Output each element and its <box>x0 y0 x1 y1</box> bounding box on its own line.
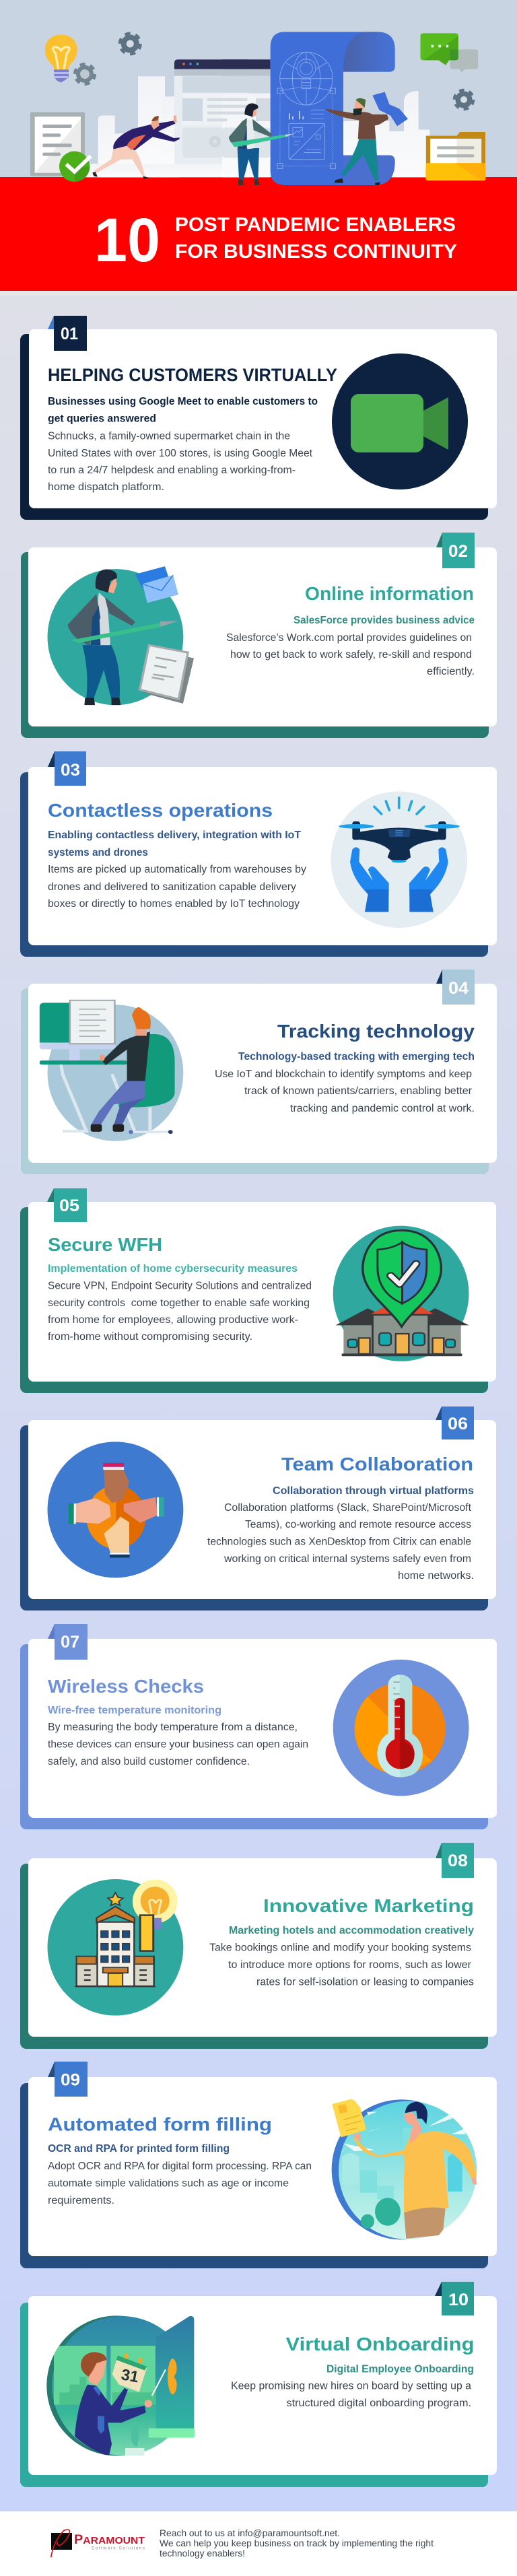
body text: safely, and also build customer confidence. <box>48 1756 250 1767</box>
heading: Automated form filling <box>48 2114 272 2134</box>
logo: PARAMOUNT <box>74 2533 145 2547</box>
illustration: shield pin over houses <box>333 1226 469 1361</box>
number badge 08: 08 <box>448 1852 468 1870</box>
subheading <box>48 396 318 424</box>
number badge 07: 07 <box>61 1633 79 1652</box>
logo: Software Solutions <box>92 2546 145 2550</box>
footer <box>0 2511 517 2576</box>
panel: 01 helping customers virtually <box>20 316 497 520</box>
panel: 07 wireless checks <box>20 1624 497 1829</box>
blue blueprint scroll <box>271 32 395 185</box>
contact text: We can help you keep business on track by implementing the right <box>160 2538 434 2548</box>
icon: gear right <box>455 91 473 108</box>
body text: Teams), co-working and remote resource access <box>245 1519 471 1530</box>
body text: track of known patients/carriers, enabling better <box>244 1085 472 1097</box>
number badge 09: 09 <box>61 2071 80 2090</box>
icon: gear top <box>120 34 139 53</box>
body text <box>226 632 475 677</box>
subheading: Wire-free temperature monitoring <box>48 1705 221 1716</box>
heading: Tracking technology <box>277 1021 475 1042</box>
body text <box>48 431 313 493</box>
subheading: get queries answered <box>48 413 156 424</box>
body text: Take bookings online and modify your booking systems <box>209 1942 471 1954</box>
number badge 07 <box>55 1624 88 1660</box>
number badge 01: 01 <box>61 325 78 343</box>
subheading: systems and drones <box>48 847 148 858</box>
illustration: hotel and light bulb <box>48 1879 183 2016</box>
body text: Schnucks, a family-owned supermarket chain in the <box>48 431 290 442</box>
subheading <box>48 829 302 858</box>
body text <box>48 864 306 910</box>
pushing man <box>92 116 180 179</box>
body text <box>207 1502 474 1582</box>
heading: Contactless operations <box>48 800 273 821</box>
body text: By measuring the body temperature from a distance, <box>48 1722 298 1733</box>
body text: from-home without compromising security. <box>48 1331 252 1343</box>
illustration: team hands <box>48 1442 183 1578</box>
body text: drones and delivered to sanitization capable delivery <box>48 881 296 893</box>
number badge 10 <box>442 2282 474 2315</box>
number badge 04 <box>442 970 475 1005</box>
contact text: Reach out to us at info@paramountsoft.net. <box>160 2528 340 2538</box>
body text: how to get back to work safely, re-skill and respond <box>230 649 472 660</box>
city skyline backdrop left <box>85 76 249 177</box>
number badge 09 <box>55 2062 88 2097</box>
panel: 10 virtual onboarding <box>20 2282 497 2487</box>
number badge 05: 05 <box>59 1196 79 1215</box>
number badge 03: 03 <box>61 761 80 780</box>
body text <box>215 1069 475 1114</box>
subheading: Businesses using Google Meet to enable customers to <box>48 396 318 407</box>
body text <box>231 2381 471 2409</box>
subheading: Implementation of home cybersecurity measures <box>48 1263 298 1275</box>
title text: POST PANDEMIC ENABLERS <box>175 214 456 236</box>
body text: Collaboration platforms (Slack, SharePoint/Microsoft <box>224 1502 472 1514</box>
number badge 01 <box>54 316 87 351</box>
panel: 04 tracking technology <box>21 970 497 1174</box>
title banner <box>0 177 517 296</box>
illustration: presenter and calendar: 31 <box>120 2365 140 2385</box>
body text <box>48 1281 312 1343</box>
body text: Use IoT and blockchain to identify symptoms and keep <box>215 1069 472 1080</box>
city skyline backdrop right <box>222 91 429 177</box>
heading: Team Collaboration <box>281 1454 473 1475</box>
body text: home networks. <box>398 1570 474 1582</box>
subheading: Technology-based tracking with emerging tech <box>238 1051 475 1062</box>
body text: working on critical internal systems safely even from <box>223 1553 471 1565</box>
heading: Secure WFH <box>48 1234 162 1255</box>
logo <box>51 2530 145 2557</box>
subheading: Collaboration through virtual platforms <box>273 1485 474 1497</box>
body text: boxes or directly to homes enabled by IoT technology <box>48 898 300 910</box>
panel: 06 team collaboration <box>20 1406 496 1611</box>
body text: security controls come together to enable safe working <box>48 1297 310 1309</box>
illustration: woman with pen and mail <box>48 566 194 705</box>
browser window <box>174 59 249 164</box>
heading: Innovative Marketing <box>263 1895 474 1916</box>
number badge 06: 06 <box>448 1415 468 1433</box>
contact text <box>160 2528 434 2558</box>
body text: to introduce more options for rooms, such as lower <box>228 1959 471 1971</box>
hero illustration <box>0 0 517 185</box>
illustration: presenter and calendar <box>46 2315 195 2456</box>
subheading: SalesForce provides business advice <box>294 615 475 626</box>
body text: home dispatch platform. <box>48 481 164 493</box>
panel: 05 secure WFH <box>20 1188 496 1393</box>
panel: 03 contactless operations <box>20 751 497 957</box>
body text: rates for self-isolation or leasing to companies <box>256 1977 474 1988</box>
icon: light bulb <box>45 35 77 83</box>
subheading: Digital Employee Onboarding <box>326 2364 474 2375</box>
body text: technologies such as XenDesktop from Citrix can enable <box>207 1536 471 1547</box>
icon: folder <box>425 132 485 180</box>
body text: requirements. <box>48 2195 114 2206</box>
number badge 03 <box>55 751 86 786</box>
illustration: man holding document <box>332 2099 477 2239</box>
icon: speech bubbles <box>420 33 478 72</box>
number badge 08 <box>442 1843 474 1878</box>
body text: automate simple validations such as age or income <box>48 2178 289 2190</box>
body text: Keep promising new hires on board by setting up a <box>231 2381 471 2392</box>
heading: Wireless Checks <box>48 1676 204 1697</box>
body text: to run a 24/7 helpdesk and enabling a working-from- <box>48 465 296 476</box>
body text: structured digital onboarding program. <box>287 2398 471 2409</box>
illustration: drone and hands <box>331 791 467 928</box>
number badge 05 <box>54 1188 87 1222</box>
icon: gear beside bulb <box>75 65 94 83</box>
icon: video camera <box>332 353 468 489</box>
illustration: person at desk <box>40 1001 183 1141</box>
heading: Virtual Onboarding <box>285 2334 474 2354</box>
body text: Adopt OCR and RPA for digital form processing. RPA can <box>48 2161 312 2172</box>
heading: HELPING CUSTOMERS VIRTUALLY <box>48 365 337 385</box>
body text: Secure VPN, Endpoint Security Solutions and centralized <box>48 1281 312 1291</box>
body text <box>209 1942 474 1988</box>
number badge 10: 10 <box>448 2291 469 2309</box>
icon: document with check <box>30 112 91 182</box>
title number 10: 10 <box>94 206 160 275</box>
illustration: thermometer <box>333 1660 469 1796</box>
body text: tracking and pandemic control at work. <box>290 1103 475 1114</box>
number badge 02 <box>442 533 475 568</box>
body text <box>48 1722 308 1767</box>
body text: Items are picked up automatically from warehouses by <box>48 864 306 875</box>
title text <box>175 214 457 263</box>
subheading: OCR and RPA for printed form filling <box>48 2143 230 2155</box>
panel: 02 online information <box>21 533 497 738</box>
body text: from home for employees, allowing productive work- <box>48 1314 298 1326</box>
panel: 08 innovative marketing <box>20 1843 497 2049</box>
number badge 04: 04 <box>448 979 469 998</box>
heading: Online information <box>305 583 474 604</box>
title text: FOR BUSINESS CONTINUITY <box>175 241 457 263</box>
subheading: Marketing hotels and accommodation creatively <box>229 1925 474 1936</box>
body text: efficiently. <box>427 666 475 677</box>
bearded man with paper <box>326 92 408 185</box>
body text: these devices can ensure your business can open again <box>48 1738 308 1751</box>
number badge 06 <box>442 1406 474 1439</box>
contact text: technology enablers! <box>160 2548 245 2558</box>
panel: 09 automated form filling <box>20 2062 497 2268</box>
body text: Salesforce’s Work.com portal provides guidelines on <box>226 632 472 644</box>
body text <box>48 2161 312 2206</box>
woman with pen <box>229 103 294 185</box>
body text: United States with over 100 stores, is using Google Meet <box>48 448 313 459</box>
number badge 02: 02 <box>448 542 468 561</box>
subheading: Enabling contactless delivery, integration with IoT <box>48 829 302 841</box>
